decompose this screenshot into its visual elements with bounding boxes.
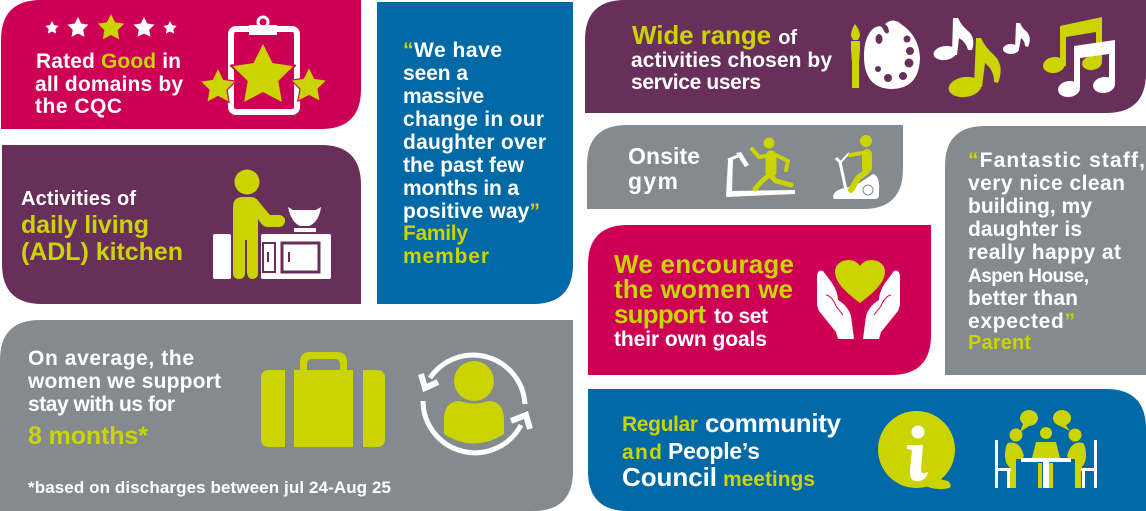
text: staff quote: daughter is [968,218,1082,241]
icon: people meeting at table [995,410,1097,488]
text: family quote: Family [403,222,468,245]
icon: five stars [45,14,177,39]
text: rated good [35,50,183,118]
text: rated good: the CQC [35,95,122,118]
panel: wide range of activities [585,0,1146,113]
text: length of stay [27,347,391,497]
text: community meetings: Regular [622,413,698,436]
text: staff quote: Aspen House, [968,266,1089,287]
text: onsite gym: Onsite [628,143,700,169]
text: family quote: seen a [403,62,468,85]
text: community meetings: meetings [723,468,815,491]
text: set goals: their own goals [614,328,767,351]
icon: hands holding heart [817,260,900,339]
text: set goals: We encourage [614,249,794,279]
text: ADL kitchen: daily living [21,211,149,239]
text: length of stay: 8 months* [28,422,148,450]
panel: rated good [1,0,361,129]
text: family quote: member [403,245,489,268]
text: staff quote: building, my [968,195,1092,218]
text: ADL kitchen: (ADL) kitchen [21,238,183,266]
text: community meetings: People’s [668,438,760,464]
text: staff quote: better than [968,287,1078,310]
text: set goals: support [614,299,706,329]
text: set goals: to set [714,305,768,328]
text: onsite gym: gym [628,168,678,194]
panel: onsite gym [587,125,903,209]
panel: ADL kitchen [2,145,361,304]
text: community meetings: Council [622,462,717,492]
icon: suitcase [261,352,385,447]
text: ADL kitchen [21,188,183,266]
text: community meetings: and [622,441,662,464]
icon: music notes [933,17,1116,99]
text: wide range: Wide range of [632,20,797,50]
text: family quote [403,39,546,268]
text: family quote: months in a [403,177,519,200]
text: staff quote: really happy at [968,241,1121,264]
panel: community meetings [588,389,1146,511]
panel: family quote [377,2,573,304]
panel: staff quote [945,126,1146,375]
text: staff quote [968,149,1145,354]
text: wide range: activities chosen by [631,49,832,72]
text: length of stay: On average, the [28,347,194,370]
text: staff quote: Parent [968,332,1031,354]
text: length of stay: *based on discharges between jul 24-Aug 25 [28,478,391,497]
text: rated good: Rated Good in [36,50,181,73]
text: community meetings [622,408,842,492]
text: family quote: change in our [403,108,544,131]
text: onsite gym [628,143,700,194]
text: rated good: all domains by [35,73,183,96]
text: wide range [631,20,832,94]
icon: person in kitchen [213,170,331,279]
icon: information bubble [878,411,955,489]
text: set goals: the women we [614,274,793,304]
text: set goals [614,249,794,351]
icon: exercise bike [833,135,879,199]
text: family quote: positive way” [403,200,540,223]
icon: clipboard with stars [200,17,327,112]
text: family quote: massive [403,85,484,108]
panel: length of stay [0,320,573,511]
text: community meetings: community [705,408,842,438]
icon: person with cycle arrows [421,355,530,453]
icon: treadmill runner [726,138,795,197]
text: wide range: service users [631,71,761,94]
icon: paintbrush and palette [851,20,920,89]
text: staff quote: expected” [968,310,1075,333]
panel: set goals [588,225,931,375]
text: staff quote: “Fantastic staff, [968,149,1145,172]
text: family quote: the past few [403,154,525,177]
text: length of stay: stay with us for [28,393,175,416]
text: ADL kitchen: Activities of [21,188,136,210]
text: family quote: daughter over [403,131,546,154]
text: staff quote: very nice clean [968,172,1125,195]
text: family quote: “We have [403,39,502,62]
text: length of stay: women we support [27,370,221,393]
